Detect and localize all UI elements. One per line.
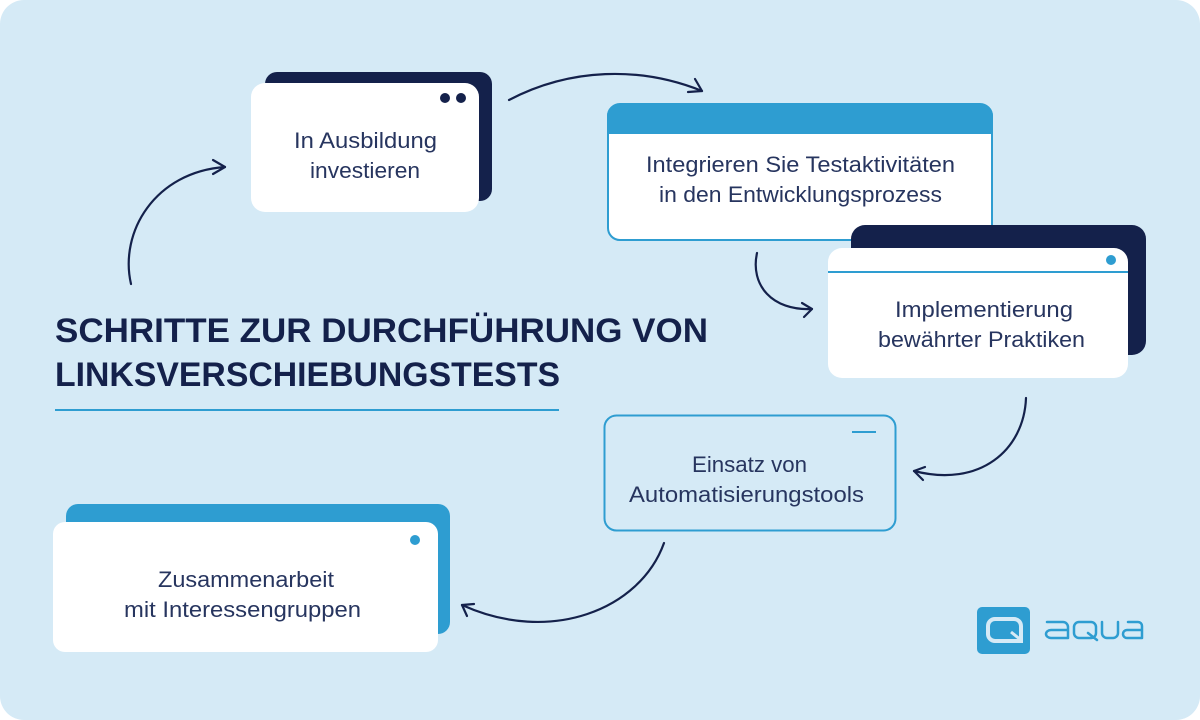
arrow: Integrieren to Implementierung [756,253,812,317]
card: Zusammenarbeit mit Interessengruppen: mit Interessengruppen [124,597,361,622]
title underline [55,409,559,411]
title: LINKSVERSCHIEBUNGSTESTS [55,356,560,394]
card: Integrieren Sie Testaktivitäten: Integrieren Sie Testaktivitäten [646,152,955,177]
logo wordmark [1046,622,1142,640]
card: Implementierung bewährter Praktiken: Implementierung [895,297,1073,322]
card: Einsatz von Automatisierungstools: Automatisierungstools [629,482,864,507]
card: Einsatz von Automatisierungstools [604,416,896,530]
arrow: Ausbildung to Integrieren [509,74,702,100]
arrow: Implementierung to Einsatz [914,398,1026,480]
card: Integrieren Sie Testaktivitäten: in den Entwicklungsprozess [659,182,942,207]
card: In Ausbildung investieren [251,72,492,212]
title: SCHRITTE ZUR DURCHFÜHRUNG VON [55,312,708,350]
logo: aqua [977,607,1142,654]
icon: aqua logo mark [977,607,1030,654]
arrow: title to Ausbildung [129,160,225,284]
card: Einsatz von Automatisierungstools: Einsatz von [692,452,807,477]
card: Implementierung bewährter Praktiken [828,225,1146,378]
card: In Ausbildung investieren: In Ausbildung [294,128,437,153]
card: Integrieren Sie Testaktivitäten [607,104,993,240]
card: In Ausbildung investieren: investieren [310,158,420,183]
card: Zusammenarbeit mit Interessengruppen: Zusammenarbeit [158,567,335,592]
card: Zusammenarbeit mit Interessengruppen [53,504,450,652]
title [55,312,708,394]
card: Implementierung bewährter Praktiken: bewährter Praktiken [878,327,1085,352]
arrow: Einsatz to Zusammenarbeit [462,543,664,622]
